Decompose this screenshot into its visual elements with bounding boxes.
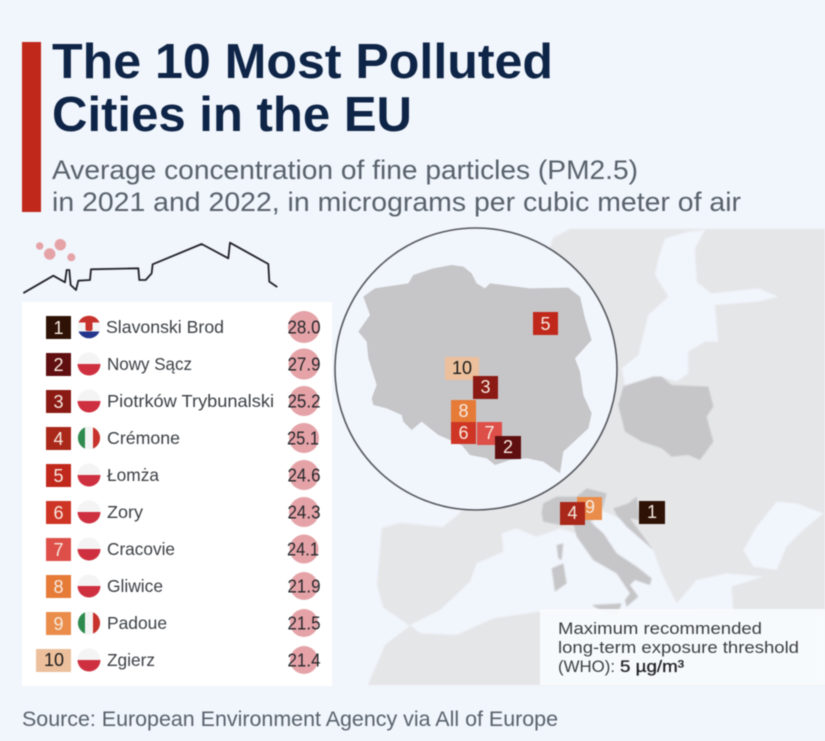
row 6 Zory [46,497,320,527]
title: The 10 Most Polluted [52,35,553,89]
row 3 Piotrków Trybunalski [46,386,320,416]
map marker 10 [445,357,479,380]
row 4 Crémone: 25.1 [287,428,319,448]
row 8 Gliwice [46,572,320,600]
row 5 Łomża: 24.6 [288,464,320,486]
map marker 2: 2 [503,437,513,457]
background map of Europe [368,229,825,685]
row 7 Cracovie: Cracovie [107,539,175,559]
row 1 Slavonski Brod: 1 [53,318,64,338]
panel: ranking table [22,302,332,686]
row 6 Zory: 6 [53,503,64,523]
row 10 Zgierz: Zgierz [107,650,155,670]
row 2 Nowy Sącz: 2 [53,355,64,375]
icon: city skyline with pollution [24,239,277,293]
row 1 Slavonski Brod [46,311,320,343]
row 3 Piotrków Trybunalski: Piotrków Trybunalski [107,391,274,411]
Black sea [743,502,823,570]
row 5 Łomża: Łomża [107,465,159,485]
map marker 7 [477,422,502,445]
row 7 Cracovie: 24.1 [287,538,319,560]
row 2 Nowy Sącz: Nowy Sącz [107,354,192,374]
row 6 Zory: 24.3 [288,502,320,522]
source line: Source: European Environment Agency via All of Europe [22,708,558,731]
row 7 Cracovie [46,534,319,564]
map marker 4 [560,502,585,525]
row 9 Padoue: Padoue [107,613,167,633]
row 8 Gliwice: 21.9 [288,576,320,596]
WHO threshold callout: long-term exposure threshold [558,638,799,657]
accent bar [22,42,41,212]
map marker 4: 4 [567,503,578,523]
row 5 Łomża: 5 [53,466,64,486]
row 9 Padoue: 9 [53,614,64,634]
Poland small [618,377,713,460]
map marker 3 [473,376,498,399]
map marker 9: 9 [585,497,595,517]
circle inset: Poland [335,228,617,510]
WHO threshold callout: 5 µg/m³ [620,657,684,676]
WHO threshold callout: Maximum recommended [558,619,762,638]
title: Cities in the EU [52,88,412,142]
row 4 Crémone: 4 [53,429,64,449]
Mediterranean sea [410,507,763,635]
row 1 Slavonski Brod: 28.0 [288,316,320,338]
row 1 Slavonski Brod: Slavonski Brod [106,317,224,337]
row 10 Zgierz [36,646,320,674]
map marker 1 [639,501,665,524]
row 4 Crémone: Crémone [107,428,180,448]
row 2 Nowy Sącz: 27.9 [288,354,320,374]
row 7 Cracovie: 7 [53,540,64,560]
row 2 Nowy Sącz [46,348,320,380]
subtitle: Average concentration of fine particles (PM2.5) [52,155,638,185]
row 8 Gliwice: Gliwice [107,576,163,596]
row 9 Padoue: 21.5 [288,612,320,634]
row 10 Zgierz: 21.4 [288,650,320,670]
row 3 Piotrków Trybunalski: 3 [53,392,64,412]
map marker 10: 10 [452,358,472,378]
map marker 5: 5 [540,314,551,334]
WHO threshold callout: (WHO): [558,657,615,676]
row 4 Crémone [46,423,319,453]
row 10 Zgierz: 10 [44,650,64,670]
map marker 7: 7 [484,423,495,443]
map marker 5 [533,312,558,335]
Italy and Croatia [542,488,653,617]
row 6 Zory: Zory [107,502,143,522]
title [52,35,553,142]
Baltic sea [622,230,778,385]
map marker 2 [495,436,521,459]
map marker 9 [577,497,602,520]
map marker 3: 3 [480,377,491,397]
map marker 6: 6 [458,423,469,443]
row 3 Piotrków Trybunalski: 25.2 [288,390,320,412]
map marker 8 [451,400,476,422]
map marker 8: 8 [458,401,469,421]
row 8 Gliwice: 8 [53,577,64,597]
subtitle [52,155,741,217]
map marker 6 [451,422,476,444]
subtitle: in 2021 and 2022, in micrograms per cubic meter of air [52,187,741,217]
row 9 Padoue [46,609,320,637]
WHO threshold callout [540,609,825,685]
row 5 Łomża [46,460,320,490]
map marker 1: 1 [647,502,657,522]
